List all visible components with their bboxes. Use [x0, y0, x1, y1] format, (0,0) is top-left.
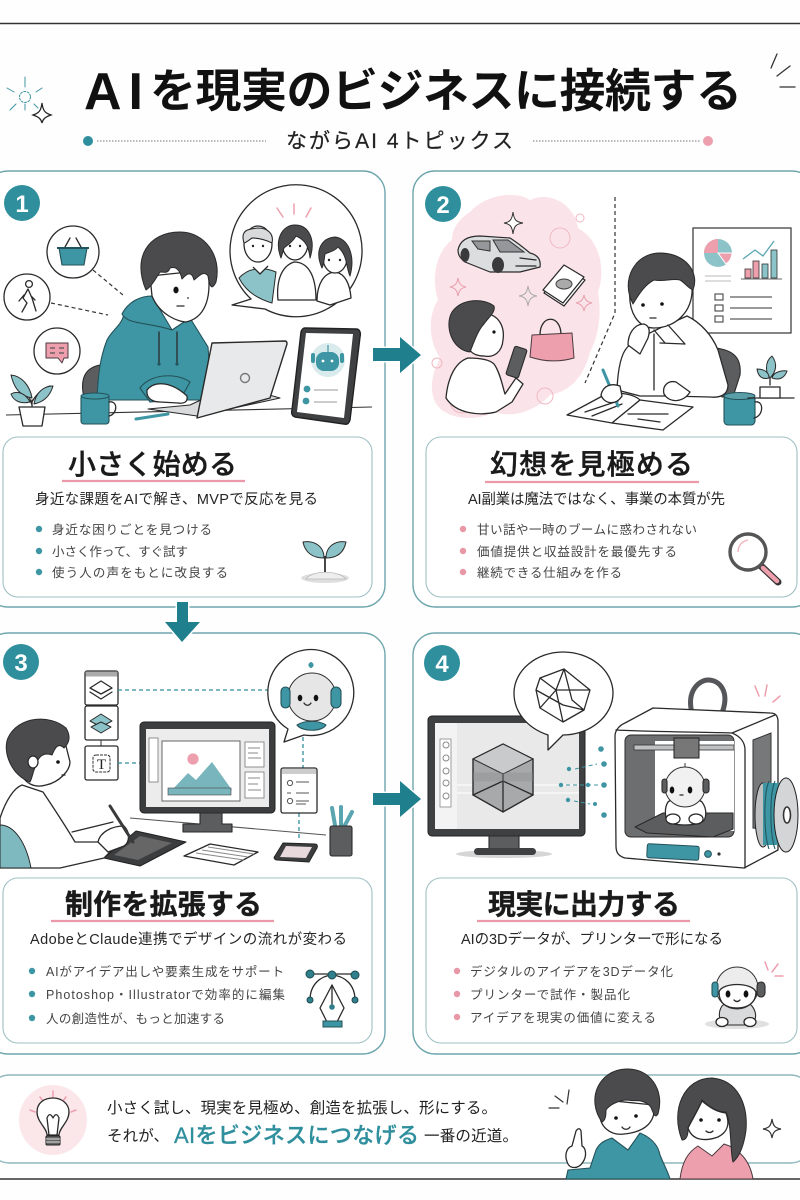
text card: step 4 — [426, 878, 797, 1043]
robot speech bubble — [268, 650, 354, 742]
mug — [724, 392, 762, 425]
small tablet — [274, 843, 317, 862]
text card: step 2 — [426, 437, 797, 597]
thinking man — [567, 253, 728, 430]
bullet list — [36, 522, 228, 580]
summary text line 2 — [107, 1123, 518, 1148]
monitor — [140, 722, 275, 832]
subtitle — [83, 130, 713, 153]
summary text line 1: 小さく試し、現実を見極め、創造を拡張し、形にする。 — [107, 1099, 497, 1117]
data dots — [559, 746, 607, 818]
number badge 3: 3 — [14, 650, 28, 677]
flow arrow: step 1 to step 3 — [165, 602, 200, 642]
title: AI — [84, 63, 143, 121]
icon: sprout — [301, 542, 349, 583]
bullet list — [460, 522, 697, 580]
connector lines — [118, 690, 303, 840]
panel: step 3 extend creation — [0, 633, 385, 1054]
icon: magnifying glass — [730, 534, 778, 582]
panel: step 1 small start — [0, 171, 385, 607]
panel: step 4 output to reality — [413, 633, 800, 1054]
drawing tablet — [104, 831, 186, 866]
tool palette: T — [97, 757, 106, 773]
summary text line 2: 一番の近道。 — [424, 1127, 518, 1145]
lead text: AdobeとClaude連携でデザインの流れが変わる — [30, 930, 347, 948]
plant — [748, 356, 794, 398]
heading: 制作を拡張する — [65, 889, 262, 920]
panel: bottom summary — [0, 1069, 800, 1179]
bullet list: デジタルのアイデアを3Dデータ化 — [470, 964, 673, 979]
keyboard — [184, 844, 258, 865]
number badge 4 — [424, 645, 460, 681]
heading: 小さく始める — [68, 449, 237, 480]
icon: shopping basket bubble — [47, 226, 123, 295]
designer — [0, 719, 133, 868]
title: を現実のビジネスに接続する — [150, 65, 742, 117]
icon: speech bubble with three people — [230, 185, 362, 317]
lead text: AIの3Dデータが、プリンターで形になる — [461, 930, 723, 948]
text card: step 1 — [3, 437, 372, 597]
heading underline — [62, 480, 245, 482]
flow arrow: step 3 to step 4 — [373, 781, 421, 817]
summary text line 2: それが、 — [107, 1127, 169, 1145]
report board — [693, 228, 791, 333]
chair — [83, 365, 100, 398]
money stack — [543, 265, 585, 306]
number badge 4: 4 — [435, 651, 449, 678]
tool palette — [85, 671, 118, 780]
bullet list: 身近な困りごとを見つける — [52, 522, 212, 537]
subtitle: ながらAI 4トピックス — [286, 130, 513, 153]
icon: light bulb — [19, 1085, 87, 1155]
tablet with robot — [292, 328, 360, 424]
pen holder — [330, 807, 352, 856]
speech bubble with polyhedron — [514, 652, 613, 750]
bullet list: 使う人の声をもとに改良する — [52, 565, 228, 580]
laptop — [148, 341, 287, 418]
bullet list: AIがアイデア出しや要素生成をサポート — [46, 964, 284, 979]
filament spool — [755, 778, 798, 852]
heading: 現実に出力する — [488, 889, 680, 920]
illustration: boy pointing up — [566, 1069, 670, 1179]
icon: walking person bubble — [4, 274, 108, 320]
pink thought cloud — [431, 195, 601, 418]
bullet list: プリンターで試作・製品化 — [470, 988, 630, 1002]
icon: small robot — [705, 962, 783, 1029]
number badge 1 — [4, 185, 40, 221]
bullet list: 価値提供と収益設計を最優先する — [477, 544, 677, 559]
bullet list: 人の創造性が、もっと加速する — [46, 1011, 225, 1026]
summary text line 2: AIをビジネスにつなげる — [174, 1123, 419, 1148]
person in hoodie — [97, 232, 217, 403]
bullet list: Photoshop・Illustratorで効率的に編集 — [46, 987, 285, 1002]
bullet list — [29, 964, 285, 1026]
icon: chat bubble — [34, 328, 80, 374]
heading underline — [51, 920, 274, 922]
illustration: girl in pink hoodie — [678, 1078, 753, 1179]
floating UI card — [281, 768, 317, 813]
dreaming person with phone — [446, 301, 527, 414]
car — [458, 236, 540, 273]
mug — [81, 393, 116, 424]
panel: step 2 see through illusions — [413, 171, 800, 607]
handbag — [530, 319, 574, 361]
number badge 2 — [425, 186, 461, 222]
bullet list — [454, 964, 673, 1025]
illustration: 3D model on monitor and 3D printer — [428, 652, 798, 868]
number badge 1: 1 — [15, 191, 29, 218]
open notebook — [567, 393, 640, 423]
3D printer — [615, 680, 778, 868]
pen on desk — [136, 414, 168, 419]
plant — [11, 375, 53, 426]
printed robot — [662, 763, 709, 825]
illustration: illusion cloud and thinking man — [431, 195, 794, 430]
illustration: person at laptop with tablet — [4, 185, 372, 426]
emphasis rays — [755, 685, 780, 702]
chair — [716, 348, 740, 397]
bullet list: 小さく作って、すぐ試す — [52, 545, 188, 559]
illustration: designer with pen tablet and AI robot — [0, 650, 354, 868]
icon: pen tool — [306, 970, 359, 1027]
number badge 3 — [3, 644, 39, 680]
heading underline — [477, 920, 690, 922]
lead text: AI副業は魔法ではなく、事業の本質が先 — [468, 490, 725, 508]
heading: 幻想を見極める — [490, 449, 693, 480]
bullet list: 甘い話や一時のブームに惑わされない — [477, 522, 697, 537]
monitor with cube — [428, 716, 585, 858]
dashed divider — [585, 197, 615, 383]
bullet list: アイデアを現実の価値に変える — [470, 1010, 656, 1025]
icon: sparkle — [763, 1119, 781, 1138]
number badge 2: 2 — [436, 192, 450, 219]
icon: emphasis rays right of title — [771, 54, 795, 87]
lead text: 身近な課題をAIで解き、MVPで反応を見る — [35, 491, 318, 508]
bullet list: 継続できる仕組みを作る — [477, 566, 622, 580]
text card: step 3 — [3, 878, 372, 1043]
heading underline — [485, 481, 699, 483]
flow arrow: step 1 to step 2 — [373, 337, 421, 373]
icon: sparkle left of title — [7, 77, 51, 123]
emphasis rays — [549, 1090, 569, 1108]
